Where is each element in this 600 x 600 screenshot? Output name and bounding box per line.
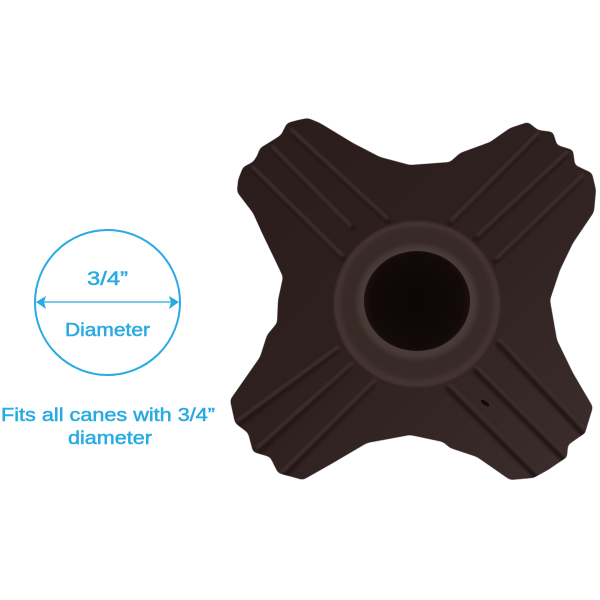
size label: 3/4” <box>87 268 128 290</box>
fit caption <box>1 404 215 448</box>
surface nick <box>480 398 490 408</box>
collar <box>334 221 500 387</box>
product: rubber cane tip <box>230 118 596 480</box>
diameter label: Diameter <box>65 319 150 340</box>
centre hole <box>364 251 470 351</box>
diameter circle <box>35 230 180 375</box>
rib shading <box>238 130 585 479</box>
fit caption: Fits all canes with 3/4” <box>1 404 215 425</box>
double-headed arrow <box>36 296 179 309</box>
fit caption: diameter <box>68 427 152 448</box>
diameter diagram <box>35 230 180 375</box>
tip body <box>230 118 596 480</box>
